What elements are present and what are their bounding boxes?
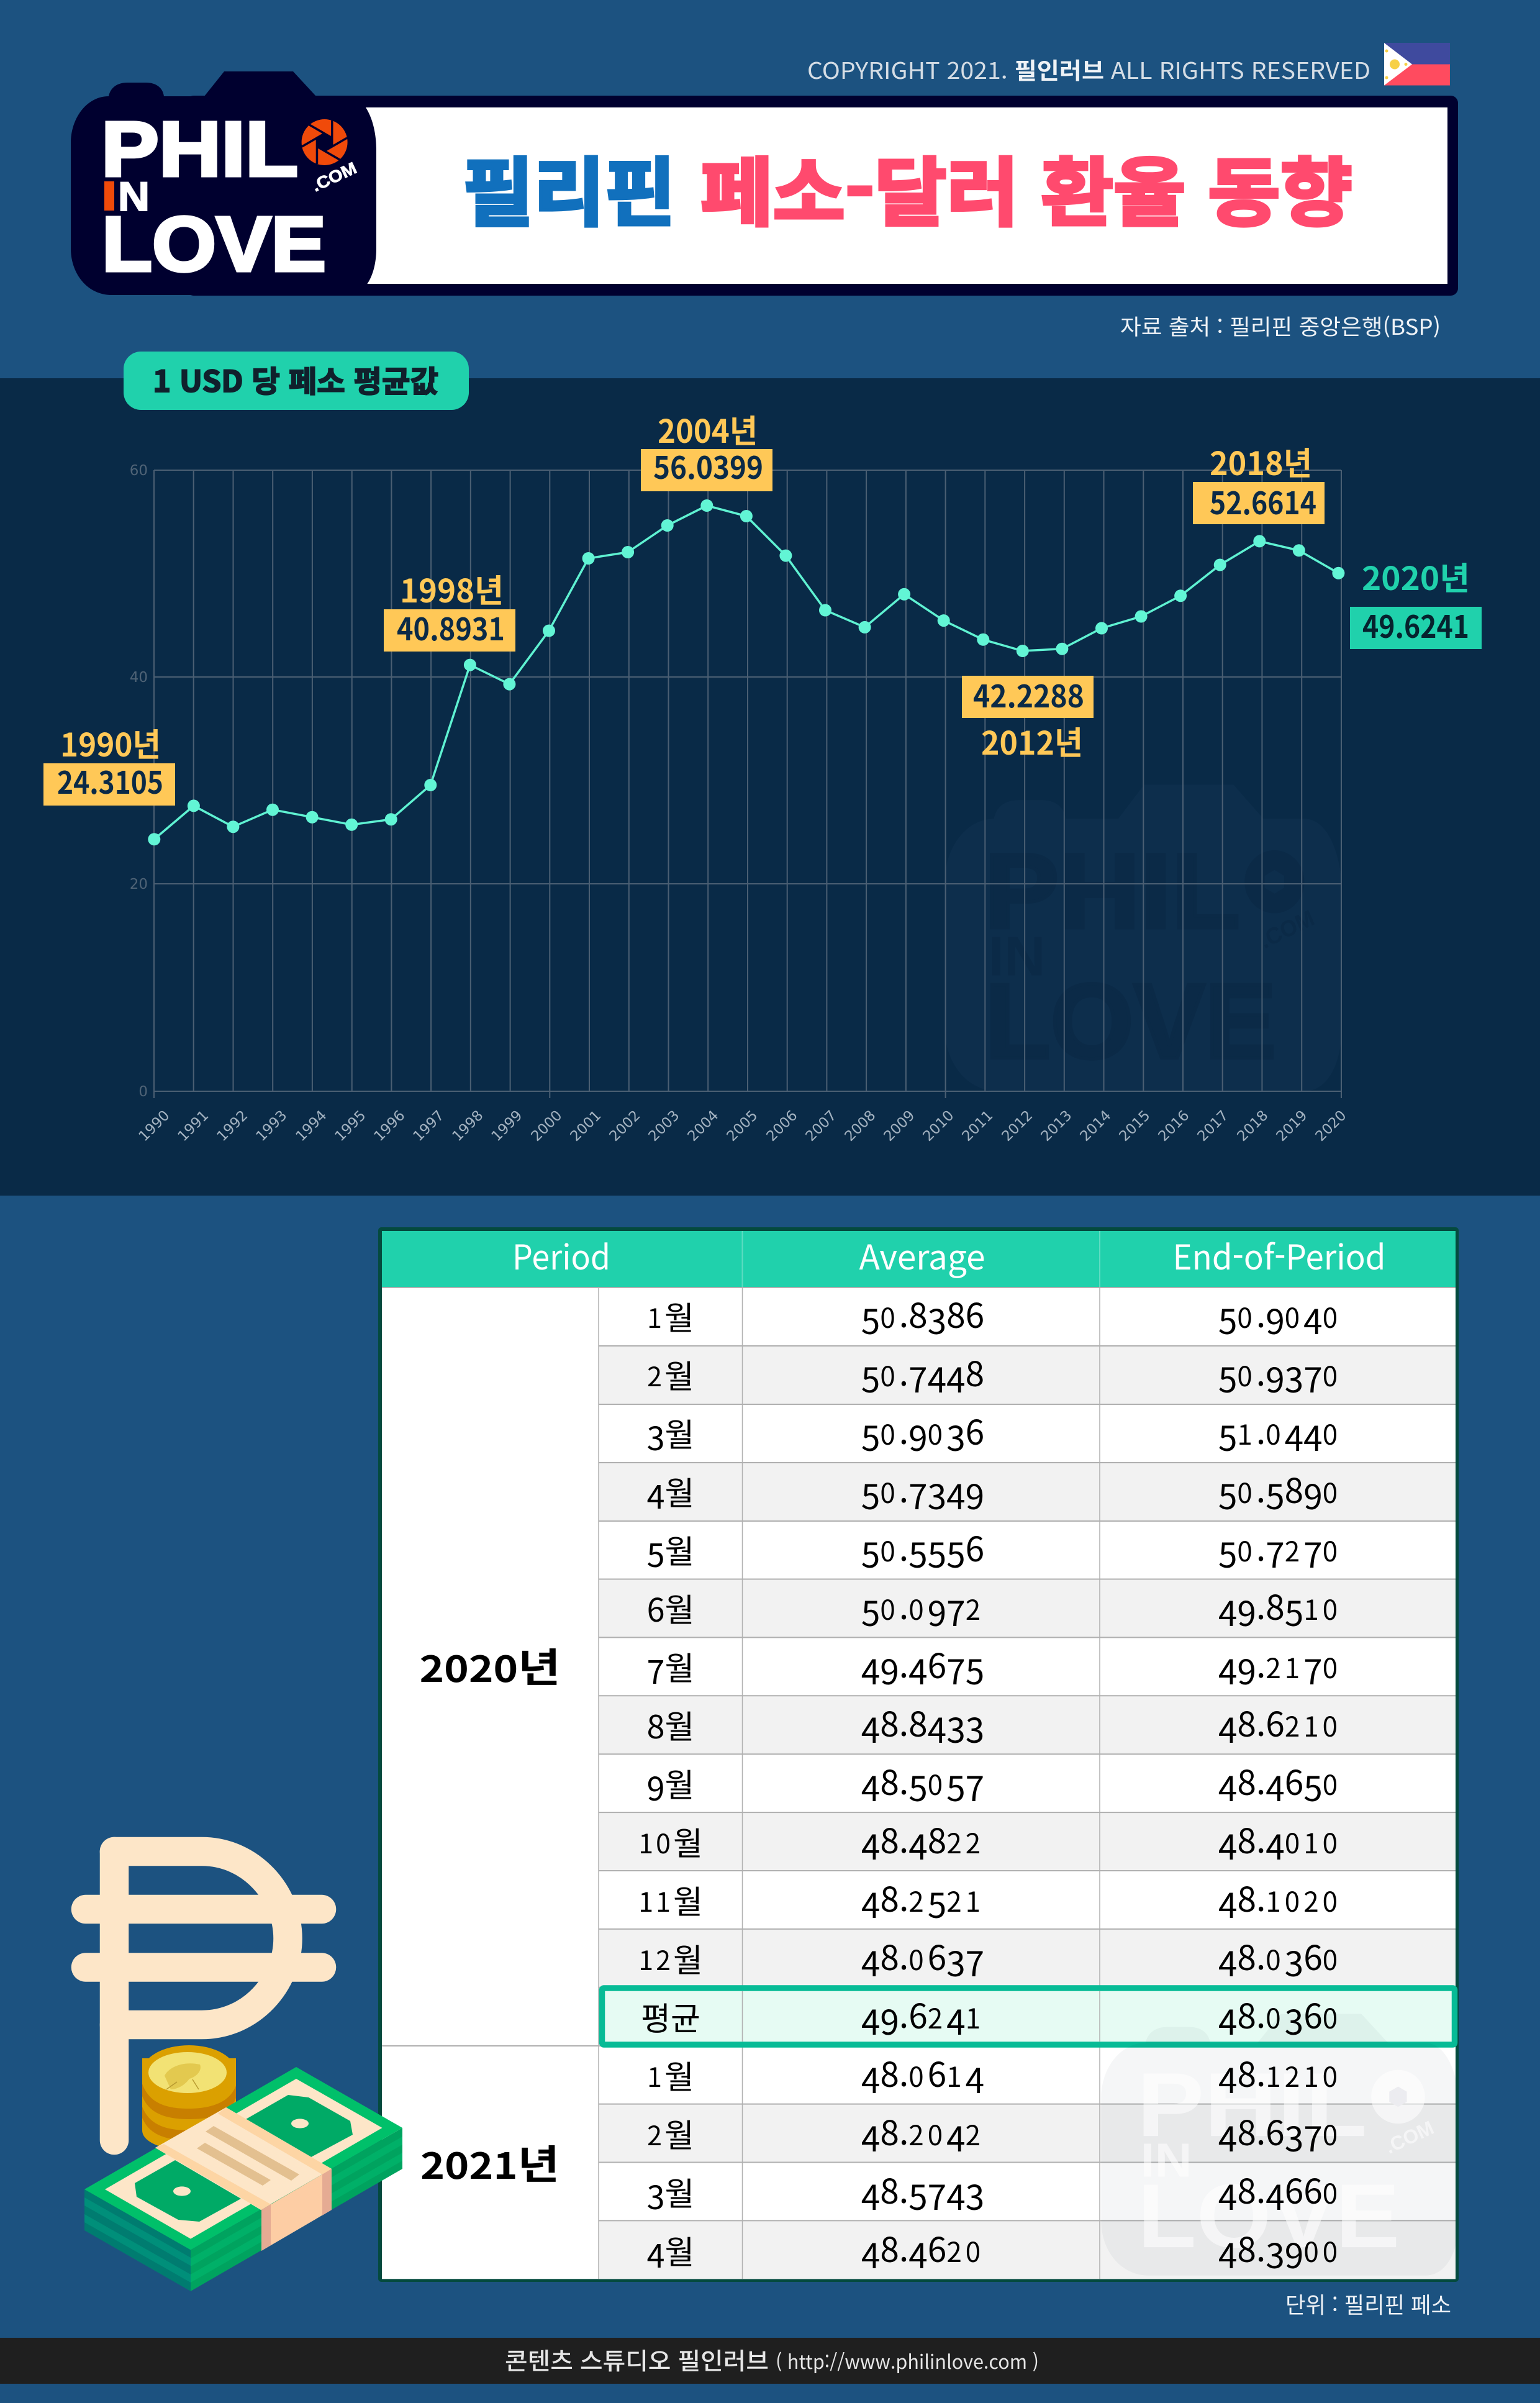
callout: 2012: 42.2288 — [973, 672, 1084, 717]
x axis labels: 1991 — [175, 1107, 212, 1145]
title banner — [71, 71, 1458, 296]
x axis labels: 2016 — [1156, 1107, 1192, 1145]
callout: 2018: 2018년 — [1210, 438, 1312, 484]
data line — [154, 506, 1338, 839]
x axis labels: 2003 — [646, 1107, 682, 1145]
x axis labels: 2018 — [1234, 1107, 1271, 1145]
row: 2020 May — [647, 1522, 1341, 1578]
icon: banknote bundle — [84, 2067, 402, 2291]
row: 2020 Nov: 48.2521 — [861, 1872, 984, 1928]
row: 2020 Dec: 48.0360 — [1218, 1930, 1341, 1986]
row: 2020 Feb: 50.9370 — [1218, 1347, 1341, 1402]
x axis labels: 2012 — [999, 1107, 1036, 1145]
row: 2020 Mar — [647, 1405, 1341, 1461]
banner white panel — [365, 107, 1447, 284]
row: 2020 Jun — [647, 1580, 1341, 1636]
x axis labels: 2019 — [1274, 1107, 1310, 1145]
row: 2020 Oct: 48.4822 — [861, 1814, 984, 1869]
copyright line: COPYRIGHT 2021. 필인러브 ALL RIGHTS RESERVED — [807, 52, 1370, 86]
bundle top face — [84, 2067, 402, 2250]
row: 2021 Feb: 2월 — [647, 2110, 694, 2156]
row: 2020 Jan: 50.9040 — [1218, 1288, 1341, 1344]
row: 2021 Feb — [647, 2105, 1341, 2161]
row: 2020 Dec: 48.0637 — [861, 1930, 984, 1986]
callout: 2020 — [1350, 553, 1482, 649]
callout: 2004 — [641, 406, 772, 491]
watermark: table logo: .COM — [1382, 2116, 1437, 2158]
table header: Period — [512, 1230, 610, 1279]
row: 2020 Mar: 50.9036 — [861, 1405, 984, 1461]
watermark: table logo: IN — [1141, 2134, 1192, 2187]
x axis labels — [136, 1107, 1349, 1145]
x axis labels: 2001 — [568, 1107, 604, 1145]
row: 2020 average: 48.0360 — [1218, 1989, 1341, 2045]
logo: philinlove camera: N — [118, 173, 150, 219]
watermark: chart logo: IN — [988, 924, 1046, 988]
y axis labels: 40 — [130, 670, 148, 686]
watermark: chart logo: PHIL — [984, 832, 1240, 951]
row: 2021 Mar: 48.5743 — [861, 2164, 984, 2220]
title text accent: 페소-달러 환율 동향 — [700, 133, 1352, 241]
watermark: chart logo: .COM — [1256, 904, 1318, 953]
row: 2020 Sep: 48.5057 — [861, 1755, 984, 1811]
x axis labels: 1999 — [489, 1107, 525, 1145]
x axis labels: 2009 — [881, 1107, 918, 1145]
row: 2020 Feb: 2월 — [647, 1351, 694, 1397]
row: 2020 Apr: 50.5890 — [1218, 1463, 1341, 1519]
row: 2021 Apr: 48.3900 — [1218, 2222, 1341, 2278]
row: 2020 Dec: 12월 — [638, 1935, 703, 1981]
x axis labels: 2005 — [724, 1107, 761, 1145]
callout: 2004: 2004년 — [658, 406, 758, 452]
x axis labels: 2002 — [607, 1107, 643, 1145]
footer bar — [0, 2338, 1540, 2384]
row: 2021 Jan: 1월 — [647, 2051, 694, 2098]
row: 2020 Nov: 48.1020 — [1218, 1872, 1341, 1928]
callout: 1998: 1998년 — [400, 565, 504, 612]
bundle left side — [84, 2189, 191, 2291]
row: 2021 Apr — [647, 2222, 1341, 2278]
row: 2021 Mar: 48.4660 — [1218, 2164, 1341, 2220]
watermark: chart logo — [944, 785, 1342, 1091]
row: 2020 Aug: 48.6210 — [1218, 1697, 1341, 1753]
x axis labels: 1998 — [450, 1107, 486, 1145]
logo: philinlove camera — [71, 71, 376, 295]
row: 2020 Apr — [647, 1463, 1341, 1519]
x axis labels: 2011 — [959, 1107, 996, 1145]
row: 2020 Oct: 10월 — [638, 1818, 703, 1865]
row: 2020 Jun: 49.8510 — [1218, 1580, 1341, 1636]
y axis labels: 20 — [130, 876, 148, 893]
year label 2020: 2020 년 — [420, 1637, 561, 1694]
callout: 2004: 56.0399 — [653, 443, 763, 488]
icon: coin stack — [142, 2045, 236, 2150]
row: 2020 Oct — [638, 1814, 1341, 1869]
bundle paper band — [155, 2107, 332, 2210]
row: 2020 Feb — [647, 1347, 1341, 1402]
line chart — [43, 406, 1482, 1145]
row: 2020 Apr: 50.7349 — [861, 1463, 984, 1519]
row: 2021 Apr: 4월 — [647, 2227, 694, 2277]
footer bar: ( http://www.philinlove.com ) — [776, 2346, 1039, 2374]
x axis labels: 1997 — [410, 1107, 447, 1145]
row: 2021 Jan: 48.0614 — [861, 2047, 984, 2103]
zebra rows — [599, 1346, 1456, 2279]
x axis labels: 2014 — [1077, 1107, 1114, 1145]
watermark: table logo: PHIL — [1137, 2054, 1367, 2155]
row: 2020 Jul — [647, 1638, 1341, 1694]
row: 2020 Apr: 4월 — [647, 1468, 694, 1518]
callout: 2018: 52.6614 — [1210, 479, 1316, 524]
table header: Average — [859, 1230, 985, 1279]
icon: philippine flag — [1384, 43, 1450, 86]
x axis labels: 2013 — [1038, 1107, 1075, 1145]
row: 2021 Jan — [647, 2047, 1341, 2103]
row: 2020 Jul: 49.4675 — [861, 1638, 984, 1694]
row: 2020 Aug: 48.8433 — [861, 1697, 984, 1753]
row: 2020 Sep: 9월 — [647, 1760, 694, 1810]
y axis labels — [130, 463, 148, 1100]
badge: chart title: 1 USD 당 페소 평균값 — [153, 357, 438, 401]
row: 2021 Feb: 48.6370 — [1218, 2105, 1341, 2161]
title text: 필리핀 — [463, 133, 676, 241]
row: 2020 Mar: 51.0440 — [1218, 1405, 1341, 1461]
table header — [382, 1230, 1456, 1288]
row: 2020 average: 평균 — [641, 1993, 700, 2040]
logo: philinlove camera: PHIL — [101, 106, 298, 193]
table header: End-of-Period — [1172, 1230, 1386, 1279]
watermark: chart logo: LOVE — [985, 962, 1276, 1081]
logo: philinlove camera: LOVE — [102, 201, 326, 288]
row: 2020 Mar: 3월 — [647, 1409, 694, 1460]
source note: 자료 출처 : 필리핀 중앙은행(BSP) — [1120, 310, 1441, 342]
watermark: table logo: LOVE — [1138, 2165, 1400, 2266]
row: 2020 average: 49.6241 — [861, 1989, 984, 2045]
x axis labels: 2010 — [920, 1107, 957, 1145]
x axis labels: 2020 — [1313, 1107, 1349, 1145]
row: 2020 Jul: 7월 — [647, 1643, 694, 1693]
row: 2020 Nov: 11월 — [638, 1876, 703, 1923]
chart grid — [154, 470, 1341, 1098]
bundle right side — [191, 2128, 402, 2291]
footer bar: 콘텐츠 스튜디오 필인러브 — [505, 2342, 769, 2376]
row rules — [382, 1288, 1456, 2279]
row: 2020 Aug: 8월 — [647, 1701, 694, 1748]
row: 2020 May: 50.7270 — [1218, 1522, 1341, 1578]
logo: philinlove camera: .COM — [309, 158, 360, 195]
x axis labels: 2007 — [803, 1107, 840, 1145]
callout: 2012 — [962, 672, 1094, 764]
row: 2020 Oct: 48.4010 — [1218, 1814, 1341, 1869]
row: 2020 Jan: 1월 — [647, 1292, 694, 1339]
row: 2020 average — [641, 1989, 1341, 2045]
callout: 2020: 49.6241 — [1362, 602, 1469, 647]
x axis labels: 2015 — [1116, 1107, 1153, 1145]
y axis labels: 60 — [130, 463, 148, 479]
row: 2020 Sep: 48.4650 — [1218, 1755, 1341, 1811]
callout: 2018 — [1193, 438, 1325, 524]
x axis labels: 2004 — [685, 1107, 722, 1145]
row: 2020 Jun: 6월 — [647, 1584, 694, 1631]
row: 2020 Sep — [647, 1755, 1341, 1811]
x axis labels: 2006 — [764, 1107, 800, 1145]
icon: peso sign — [86, 1851, 322, 2140]
year label 2021: 2021 년 — [420, 2133, 559, 2191]
x axis labels: 2017 — [1195, 1107, 1231, 1145]
y axis labels: 0 — [138, 1084, 148, 1100]
table frame — [378, 1227, 1459, 2282]
x axis labels: 2000 — [528, 1107, 565, 1145]
row: 2021 Apr: 48.4620 — [861, 2222, 984, 2278]
row: 2020 Aug — [647, 1697, 1341, 1753]
x axis labels: 1993 — [253, 1107, 290, 1145]
row: 2021 Mar — [647, 2164, 1341, 2220]
x axis labels: 1996 — [371, 1107, 408, 1145]
callout: 1990: 24.3105 — [57, 758, 163, 803]
callout: 2012: 2012년 — [981, 717, 1083, 764]
row: 2020 Dec — [638, 1930, 1341, 1986]
data table — [378, 1227, 1459, 2282]
data points — [148, 499, 1344, 845]
row: 2021 Feb: 48.2042 — [861, 2105, 984, 2161]
row: 2020 Jan: 50.8386 — [861, 1288, 984, 1344]
row: 2020 May: 5월 — [647, 1526, 694, 1576]
callout: 1998 — [384, 565, 515, 652]
callout: 1990 — [43, 719, 175, 806]
callout: 1998: 40.8931 — [397, 605, 505, 650]
row: 2020 Jun: 50.0972 — [861, 1580, 984, 1636]
unit note: 단위 : 필리핀 페소 — [1285, 2287, 1451, 2320]
x axis labels: 1994 — [293, 1107, 330, 1145]
callout: 1990: 1990년 — [60, 719, 161, 766]
row: 2020 Nov — [638, 1872, 1341, 1928]
badge: chart title — [124, 352, 469, 410]
panel: chart background — [0, 378, 1540, 1196]
highlight row: average — [602, 1988, 1454, 2045]
row: 2020 Feb: 50.7448 — [861, 1347, 984, 1402]
row: 2021 Mar: 3월 — [647, 2168, 694, 2219]
callout: 2020: 2020년 — [1362, 553, 1470, 599]
row: 2021 Jan: 48.1210 — [1218, 2047, 1341, 2103]
x axis labels: 1995 — [332, 1107, 369, 1145]
x axis labels: 2008 — [842, 1107, 879, 1145]
x axis labels: 1992 — [214, 1107, 251, 1145]
row: 2020 Jan — [647, 1288, 1341, 1344]
row: 2020 May: 50.5556 — [861, 1522, 984, 1578]
x axis labels: 1990 — [136, 1107, 173, 1145]
watermark: table logo — [1101, 2014, 1459, 2276]
row: 2020 Jul: 49.2170 — [1218, 1638, 1341, 1694]
